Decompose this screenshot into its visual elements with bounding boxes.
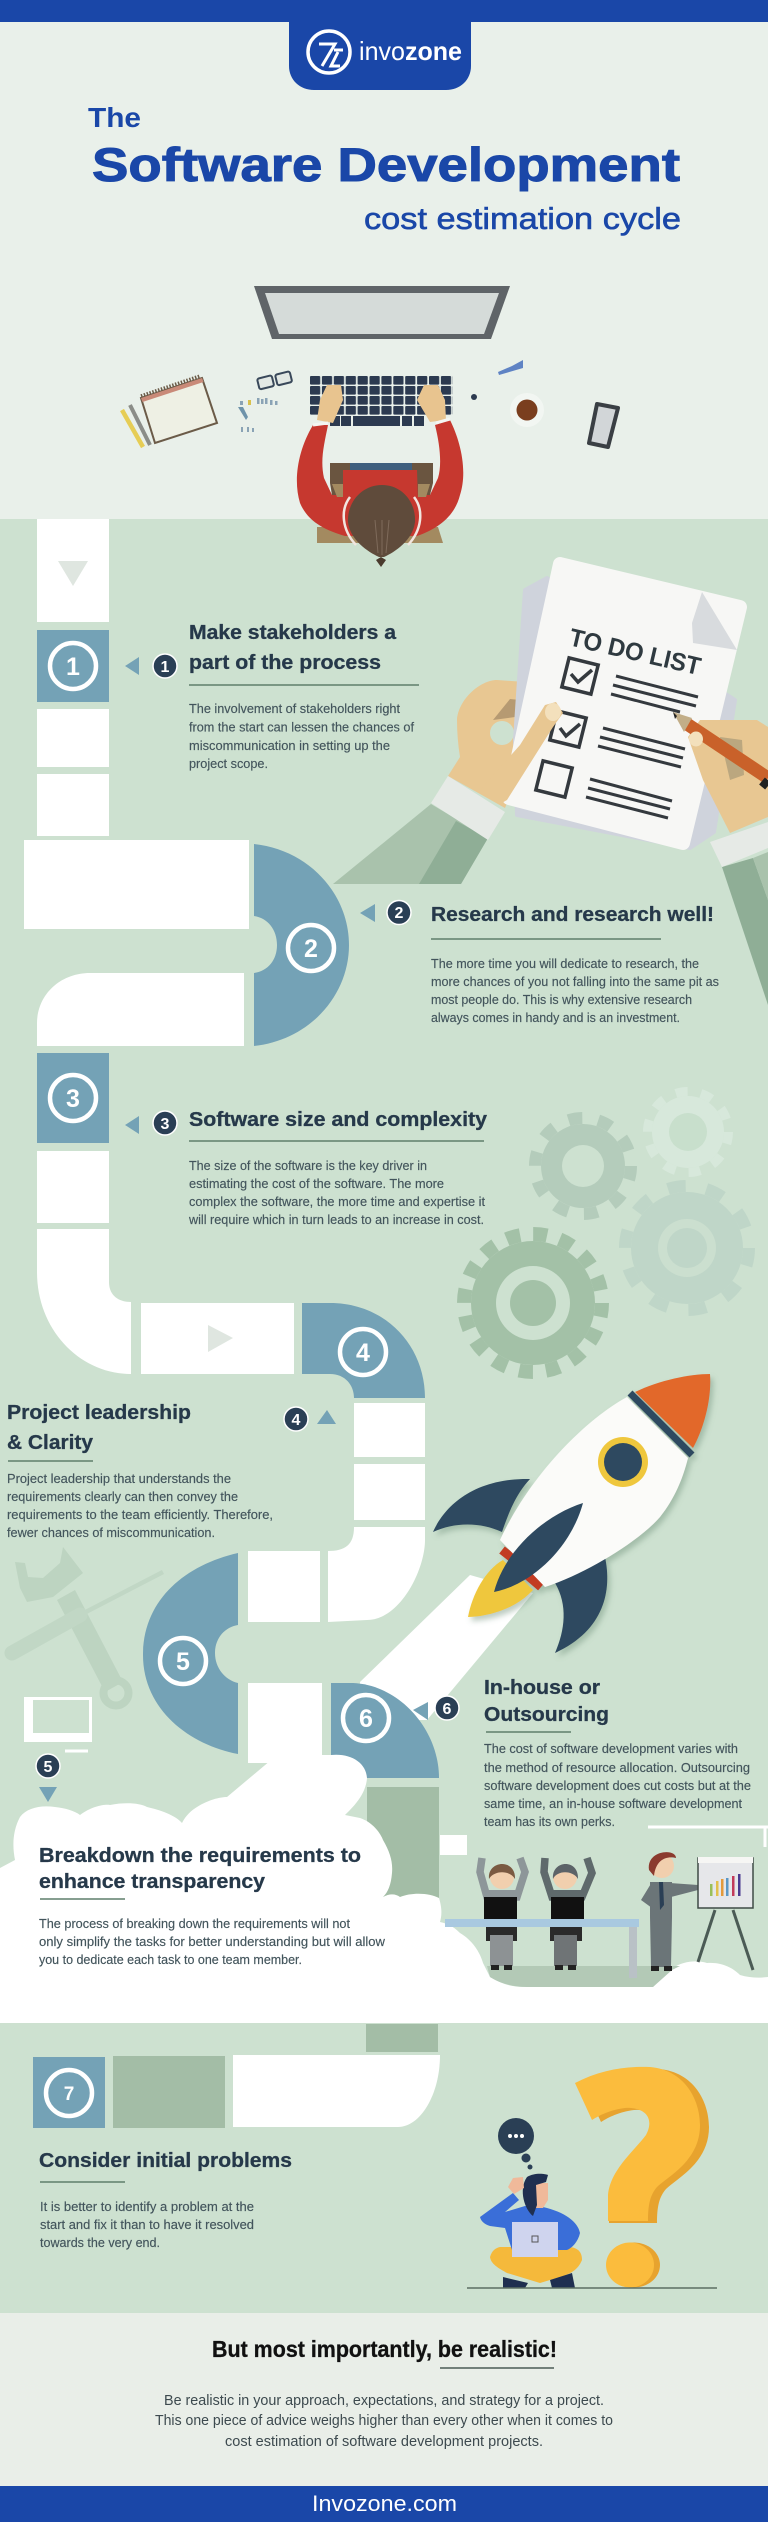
step tile 6: 6 (359, 1705, 373, 1733)
rocket center fin (494, 1503, 583, 1592)
body: step 4: fewer chances of miscommunication. (7, 1526, 215, 1540)
panel: steps background (0, 519, 768, 2023)
body: step 1 (189, 702, 415, 771)
step 6 text (413, 1676, 751, 1829)
illustration: desk from above (122, 286, 618, 567)
icon: checklist back sheet (515, 578, 735, 848)
body: step 6: team has its own perks. (484, 1815, 615, 1829)
panel: header background (0, 0, 768, 519)
dark green tile below 6 (367, 1787, 439, 1907)
step tile 6 (331, 1683, 439, 1778)
laptop two (551, 1897, 584, 1919)
heading: step 5: Breakdown the requirements to (39, 1844, 361, 1867)
step tile 7: 7 (64, 2084, 74, 2105)
body: step 1: miscommunication in setting up the (189, 739, 390, 753)
body: step 7: towards the very end. (40, 2236, 160, 2250)
badge: step 6: 6 (443, 1701, 452, 1718)
title: The (88, 102, 141, 133)
rocket nose (635, 1374, 710, 1448)
step tile 3 (37, 1053, 109, 1143)
step tile 3: 3 (66, 1085, 80, 1113)
icon: mouse (471, 394, 477, 400)
table (445, 1919, 639, 1978)
icon: gear medium (535, 1118, 631, 1214)
body: step 6: same time, an in-house software development (484, 1797, 743, 1811)
body: step 5: only simplify the tasks for better understanding but will allow (39, 1935, 386, 1949)
heading: step 5 (39, 1844, 361, 1893)
presentation board (698, 1857, 753, 1970)
badge: step 1: 1 (161, 659, 170, 676)
heading: step 4: & Clarity (7, 1431, 94, 1454)
icon: floor line (467, 2287, 717, 2289)
ground shadow (487, 1966, 680, 1987)
icon: question mark (575, 2067, 709, 2288)
rocket flame (468, 1560, 533, 1617)
step 2 text (360, 900, 719, 1025)
body: step 3 (188, 1159, 486, 1227)
body: step 2: always comes in handy and is an investment. (431, 1011, 680, 1025)
icon: person from above (297, 419, 463, 567)
body: conclusion: This one piece of advice weighs higher than every other when it comes to (155, 2413, 613, 2429)
to do list label: TO DO LIST (567, 624, 704, 681)
heading: step 4 (7, 1401, 191, 1454)
body: step 5 (39, 1917, 386, 1967)
body: step 1: from the start can lessen the chances of (189, 720, 415, 734)
arrow: step 3 pointer (125, 1116, 139, 1134)
badge: step 4 (284, 1407, 308, 1431)
heading: step 1 (189, 621, 397, 674)
heading: step 6: Outsourcing (484, 1703, 609, 1726)
body: step 3: The size of the software is the key driver in (189, 1159, 427, 1173)
badge: step 3: 3 (161, 1116, 170, 1133)
badge: step 2 (387, 900, 411, 924)
body: step 6 (484, 1742, 751, 1829)
badge: step 6 (435, 1696, 459, 1720)
heading: step 1: Make stakeholders a (189, 621, 397, 644)
icon: gear right (625, 1186, 749, 1310)
body: step 6: the method of resource allocation. Outsourcing (484, 1761, 750, 1775)
title (88, 102, 681, 236)
path tiles: step 7 row (113, 2024, 440, 2128)
arrow: step 2 pointer (360, 904, 375, 922)
icon: left hand back (448, 680, 525, 808)
badge: step 5 (36, 1754, 60, 1778)
icon: notebook and pencils (122, 376, 217, 447)
badge: step 5: 5 (44, 1759, 53, 1776)
person one (480, 1858, 525, 1970)
icon: hands (317, 385, 446, 423)
icon: checklist lines (586, 676, 698, 818)
body: conclusion: Be realistic in your approach, expectations, and strategy for a project. (164, 2393, 604, 2409)
icon: screwdriver (80, 1572, 163, 1615)
icon: keyboard (310, 376, 453, 426)
heading: step 6 (484, 1676, 609, 1726)
rocket band (630, 1393, 692, 1455)
body: step 7: start and fix it than to have it resolved (40, 2218, 254, 2232)
step 3 text (125, 1108, 488, 1227)
icon: thinking person (480, 2174, 582, 2288)
body: step 1: project scope. (189, 757, 268, 771)
step tile 1: 1 (66, 653, 80, 681)
icon: thought bubble (498, 2118, 534, 2170)
step tile 2: 2 (304, 935, 318, 963)
heading: step 4: Project leadership (7, 1401, 191, 1424)
body: conclusion: cost estimation of software development projects. (225, 2434, 543, 2450)
heading: step 2: Research and research well! (431, 903, 714, 926)
icon: checklist paper (509, 564, 740, 843)
cloud (0, 1755, 768, 2023)
illustration: team meeting (445, 1827, 768, 1987)
body: step 3: will require which in turn leads to an increase in cost. (188, 1213, 484, 1227)
title: cost estimation cycle (364, 201, 681, 236)
body: step 4: Project leadership that understands the (7, 1472, 231, 1486)
body: step 6: The cost of software development varies with (484, 1742, 738, 1756)
badge: step 2: 2 (395, 905, 404, 922)
illustration: tools watermark (12, 1547, 163, 1706)
body: step 5: you to dedicate each task to one team member. (39, 1953, 302, 1967)
body: step 3: complex the software, the more time and expertise it (189, 1195, 486, 1209)
white corner line (648, 1827, 768, 1847)
body: step 4: requirements clearly can then convey the (7, 1490, 238, 1504)
rocket red bands (502, 1550, 541, 1587)
icon: left arm (333, 804, 488, 884)
icon: left thumb (480, 702, 563, 804)
arrow: step 6 pointer (413, 1702, 428, 1720)
icon: invozone logo mark (308, 31, 350, 73)
icon: monitor (254, 286, 510, 339)
step tile 2 (254, 844, 349, 1046)
presenter (641, 1852, 698, 1971)
illustration: rocket (433, 1374, 710, 1653)
arrow: step 1 pointer (125, 657, 139, 675)
icon: wrench (15, 1547, 128, 1706)
step tile 4 (302, 1303, 425, 1398)
body: step 1: The involvement of stakeholders right (189, 702, 401, 716)
arrow: step 5 pointer (39, 1787, 57, 1802)
illustration: hands holding checklist (333, 564, 768, 1005)
arrow: path direction right (208, 1325, 233, 1352)
person two (544, 1858, 592, 1970)
icon: right hand (688, 720, 768, 833)
panel: conclusion (0, 2313, 768, 2486)
body: step 5: The process of breaking down the requirements will not (39, 1917, 351, 1931)
game path: white squares (24, 519, 425, 1763)
body: step 2: most people do. This is why extensive research (431, 993, 692, 1007)
small white square (440, 1835, 467, 1855)
badge: step 1 (153, 654, 177, 678)
heading: step 1: part of the process (189, 651, 381, 674)
laptop one (484, 1897, 517, 1919)
title: Software Development (92, 138, 680, 191)
icon: left cuff (431, 776, 505, 840)
rocket body (500, 1397, 688, 1587)
illustration: thinking person and question mark (467, 2067, 717, 2288)
body: step 4 (7, 1472, 273, 1540)
header bar with logo (0, 0, 768, 90)
heading: step 7: Consider initial problems (39, 2149, 292, 2172)
rocket window (598, 1437, 648, 1487)
step tile 7 (33, 2057, 105, 2128)
body: step 3: estimating the cost of the software. The more (189, 1177, 444, 1191)
arrow: path direction down (58, 561, 88, 586)
body: step 6: software development does cut costs but at the (484, 1779, 751, 1793)
heading: step 5: enhance transparency (39, 1870, 266, 1893)
icon: gear large (464, 1234, 602, 1372)
body: step 2 (431, 957, 719, 1025)
body: step 7 (40, 2200, 254, 2250)
rocket exhaust beam (360, 1575, 533, 1720)
heading: conclusion: But most importantly, be realistic! (212, 2336, 557, 2362)
step 5 text (36, 1754, 386, 1967)
panel: step 7 background (0, 2023, 768, 2313)
body: step 2: more chances of you not falling into the same pit as (431, 975, 719, 989)
step tile 4: 4 (356, 1339, 370, 1367)
footer (0, 2486, 768, 2522)
body: step 2: The more time you will dedicate to research, the (431, 957, 699, 971)
step tile 1 (37, 630, 109, 702)
icon: paper charts (238, 360, 523, 432)
logo wordmark: invozone (359, 36, 462, 66)
icon: phone (589, 404, 618, 447)
footer: Invozone.com (312, 2491, 457, 2516)
step 1 text (125, 621, 419, 771)
heading: step 3: Software size and complexity (189, 1108, 488, 1131)
step tile 5 (143, 1553, 238, 1754)
illustration: monitor outline watermark (24, 1697, 92, 1751)
step tile 5: 5 (176, 1648, 190, 1676)
step 4 text (7, 1401, 336, 1540)
icon: gear pale top right (648, 1092, 728, 1172)
badge: step 4: 4 (292, 1412, 301, 1429)
body: conclusion (155, 2393, 613, 2450)
icon: checkboxes (536, 658, 598, 797)
heading: step 6: In-house or (484, 1676, 600, 1699)
rocket right fin (555, 1557, 607, 1653)
icon: page fold (692, 592, 737, 650)
illustration: gears (464, 1092, 749, 1372)
icon: coffee cup (510, 393, 544, 427)
badge: step 3 (153, 1111, 177, 1135)
arrow: step 4 pointer (317, 1410, 336, 1424)
icon: right arm (710, 822, 768, 1005)
icon: glasses (257, 371, 292, 390)
rocket left fin (433, 1479, 530, 1532)
body: step 4: requirements to the team efficiently. Therefore, (7, 1508, 273, 1522)
icon: pencil (673, 712, 768, 786)
body: step 7: It is better to identify a problem at the (40, 2200, 254, 2214)
